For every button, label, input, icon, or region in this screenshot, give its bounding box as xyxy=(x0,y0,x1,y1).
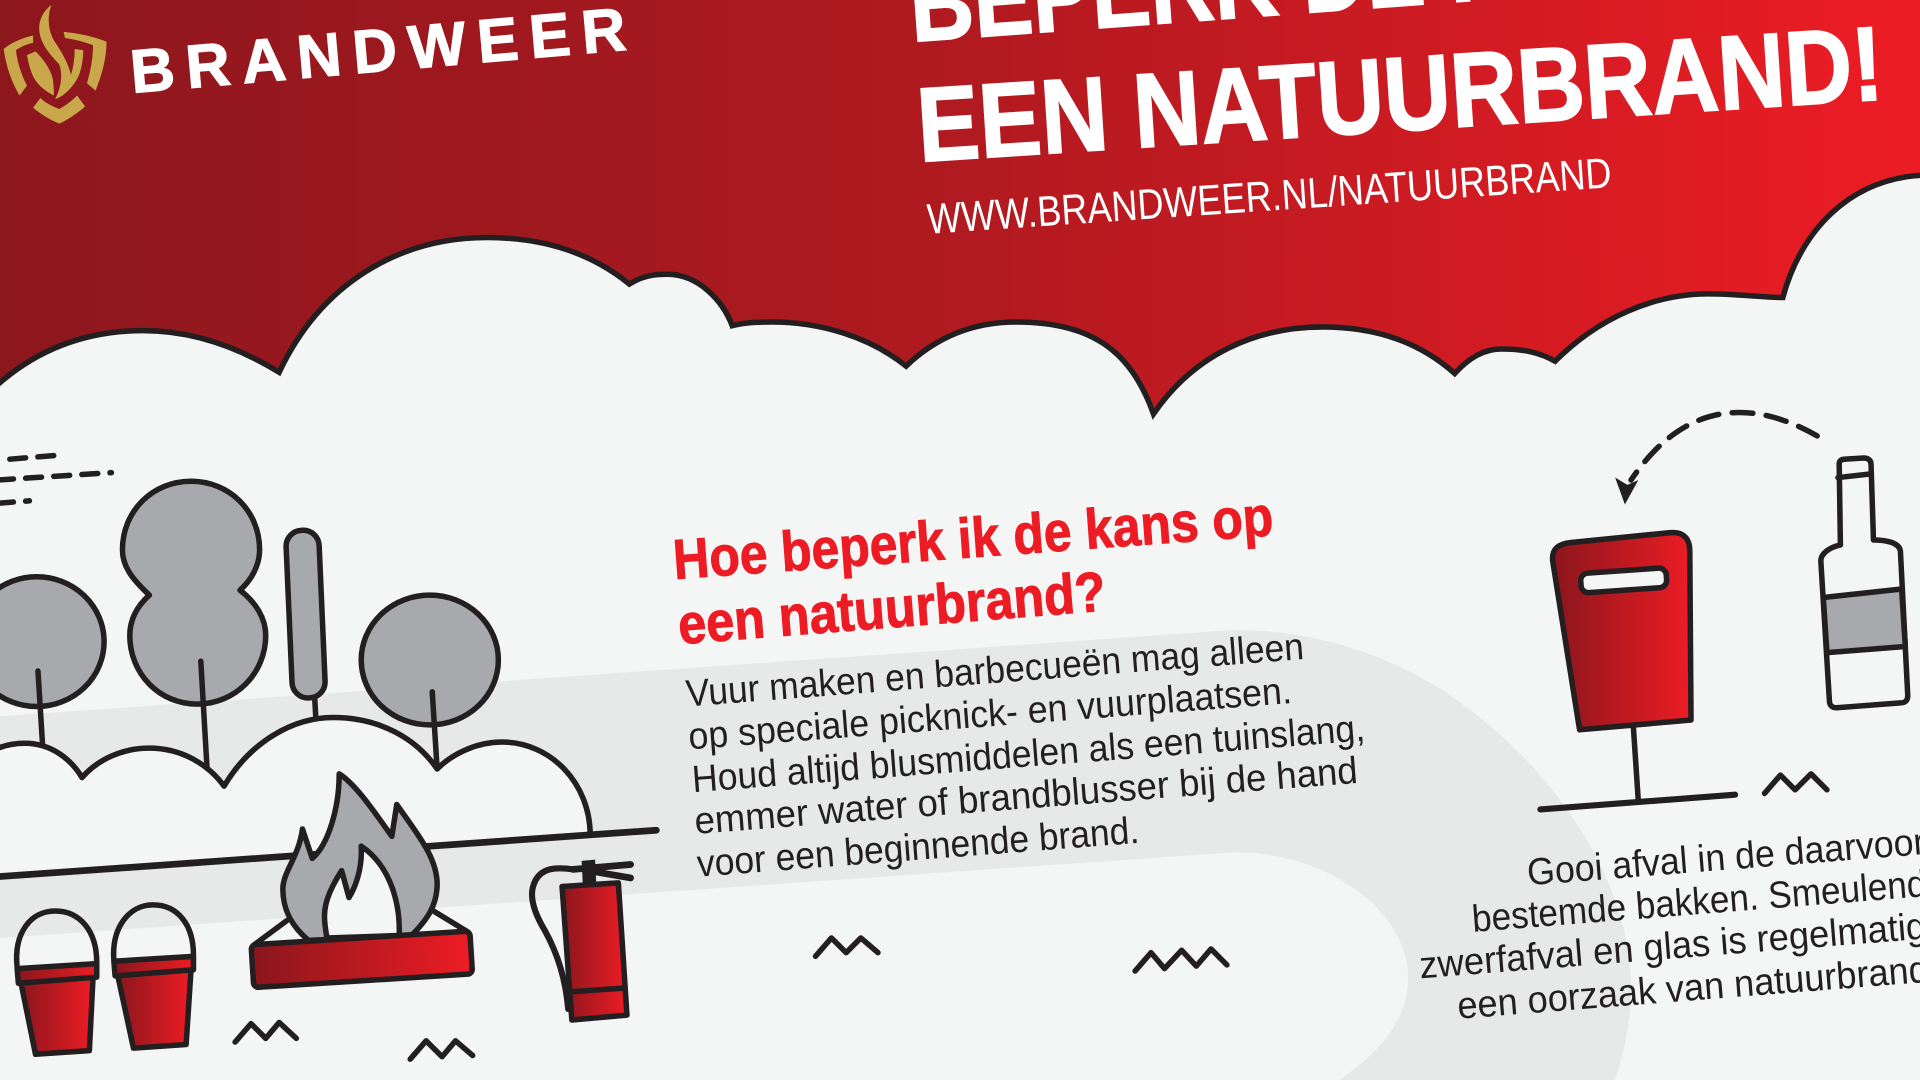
icon: bucket left xyxy=(17,911,97,1054)
website url: WWW.BRANDWEER.NL/NATUURBRAND xyxy=(926,149,1613,244)
ground line xyxy=(0,830,656,877)
icon: campfire xyxy=(251,774,473,988)
body text: fire prevention: Houd altijd blusmiddelen als een tuinslang, xyxy=(691,708,1366,801)
logo: Brandweer shield and flame xyxy=(4,5,107,124)
ground squiggles xyxy=(235,774,1827,1059)
icon: litter bin xyxy=(1540,533,1735,809)
icon: bucket right xyxy=(114,905,193,1048)
body text: fire prevention: emmer water of brandblusser bij de hand xyxy=(693,750,1359,843)
body text: fire prevention: voor een beginnende brand. xyxy=(695,810,1141,886)
dashed arrow into bin xyxy=(1615,412,1817,504)
grey curved road band xyxy=(0,630,1631,1080)
wind dashes xyxy=(0,456,111,503)
heading xyxy=(671,484,1275,656)
icon: bottle xyxy=(1821,458,1908,708)
body text: fire prevention xyxy=(684,626,1366,886)
heading: Hoe beperk ik de kans op xyxy=(671,484,1275,591)
header background xyxy=(0,0,1920,514)
icon: fire extinguisher xyxy=(532,860,631,1020)
heading: een natuurbrand? xyxy=(676,560,1108,656)
body text: litter xyxy=(1418,821,1920,1028)
illustration: trees and bushes xyxy=(0,481,590,877)
body text: fire prevention: op speciale picknick- en vuurplaatsen. xyxy=(687,670,1293,758)
body text: fire prevention: Vuur maken en barbecueën mag alleen xyxy=(684,626,1305,716)
